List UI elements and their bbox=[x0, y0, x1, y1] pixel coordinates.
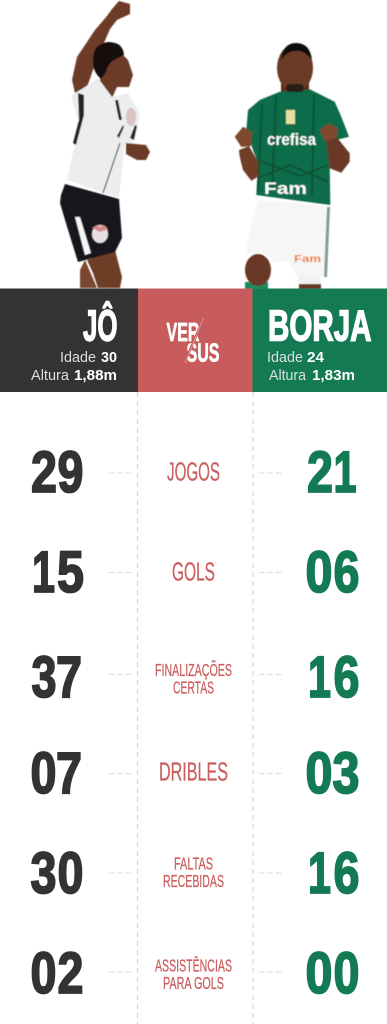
stat row: finalizações certas: 1 bbox=[308, 645, 331, 710]
stat row: jogos: 9 bbox=[58, 440, 84, 505]
player name: Jô: JÔ bbox=[83, 300, 118, 350]
stat row: dribles: 0 bbox=[306, 741, 332, 806]
player details: Jô: 1,88m bbox=[74, 368, 117, 384]
stat row: jogos: 2 bbox=[31, 440, 57, 505]
stat row: assistências para gols: 0 bbox=[334, 941, 360, 1006]
player details: Jô: Altura bbox=[31, 368, 70, 384]
stat row: assistências para gols bbox=[30, 941, 360, 1006]
stat row: faltas recebidas: RECEBIDAS bbox=[163, 871, 224, 891]
stat row: dribles: DRIBLES bbox=[159, 758, 228, 786]
stat row: finalizações certas bbox=[32, 645, 360, 710]
stat row: faltas recebidas: 6 bbox=[334, 841, 360, 906]
stat row: jogos bbox=[31, 440, 356, 505]
player photo: Jô bbox=[60, 1, 150, 288]
stat row: gols: 0 bbox=[306, 540, 332, 605]
header panel: versus: SUS bbox=[186, 338, 220, 368]
player details: Borja: Idade bbox=[267, 350, 303, 366]
stat row: faltas recebidas: 3 bbox=[30, 841, 56, 906]
stat row: finalizações certas: CERTAS bbox=[173, 678, 214, 698]
player details: Borja: Altura bbox=[269, 368, 307, 384]
player details: Borja bbox=[267, 350, 355, 384]
stat row: jogos: 2 bbox=[307, 440, 333, 505]
stat row: finalizações certas: 3 bbox=[32, 645, 56, 710]
player details: Jô: 30 bbox=[101, 350, 117, 366]
player details: Borja: 1,83m bbox=[312, 368, 355, 384]
header panel: versus bbox=[138, 288, 252, 392]
stat row: assistências para gols: PARA GOLS bbox=[163, 973, 224, 993]
stat row: dribles: 3 bbox=[332, 741, 360, 806]
header panel: Borja bbox=[252, 288, 387, 392]
stat row: assistências para gols: 0 bbox=[30, 941, 56, 1006]
stat row: dribles bbox=[30, 741, 360, 806]
stat row: dribles: 7 bbox=[56, 741, 82, 806]
player details: Borja: 24 bbox=[307, 350, 324, 366]
stat row: gols: 5 bbox=[57, 540, 84, 605]
player details: Jô bbox=[31, 350, 117, 384]
stat row: jogos: 1 bbox=[334, 440, 356, 505]
stat row: gols: 6 bbox=[334, 540, 360, 605]
player photo: Borja: Fam bbox=[294, 254, 321, 265]
stat row: faltas recebidas: 1 bbox=[308, 841, 331, 906]
player photo: Borja: crefisa bbox=[267, 130, 316, 149]
stat row: faltas recebidas: FALTAS bbox=[174, 854, 213, 874]
stat row: gols: 1 bbox=[32, 540, 55, 605]
header panel: Jô bbox=[0, 288, 138, 392]
player photo: Borja: Fam bbox=[264, 179, 307, 198]
stat row: jogos: JOGOS bbox=[167, 458, 220, 486]
stat row: finalizações certas: FINALIZAÇÕES bbox=[155, 659, 232, 680]
stat row: assistências para gols: 2 bbox=[58, 941, 84, 1006]
stat row: finalizações certas: 6 bbox=[334, 645, 360, 710]
header panel: versus: VER bbox=[166, 317, 200, 347]
player photo: Borja bbox=[235, 43, 350, 289]
stat row: gols: GOLS bbox=[172, 558, 215, 586]
stat row: assistências para gols: 0 bbox=[306, 941, 332, 1006]
stat row: assistências para gols: ASSISTÊNCIAS bbox=[155, 956, 232, 976]
stat row: gols bbox=[32, 540, 360, 605]
stat row: faltas recebidas: 0 bbox=[58, 841, 84, 906]
player details: Jô: Idade bbox=[60, 350, 96, 366]
stat row: faltas recebidas bbox=[30, 841, 360, 906]
stat row: dribles: 0 bbox=[30, 741, 56, 806]
stat row: finalizações certas: 7 bbox=[56, 645, 82, 710]
